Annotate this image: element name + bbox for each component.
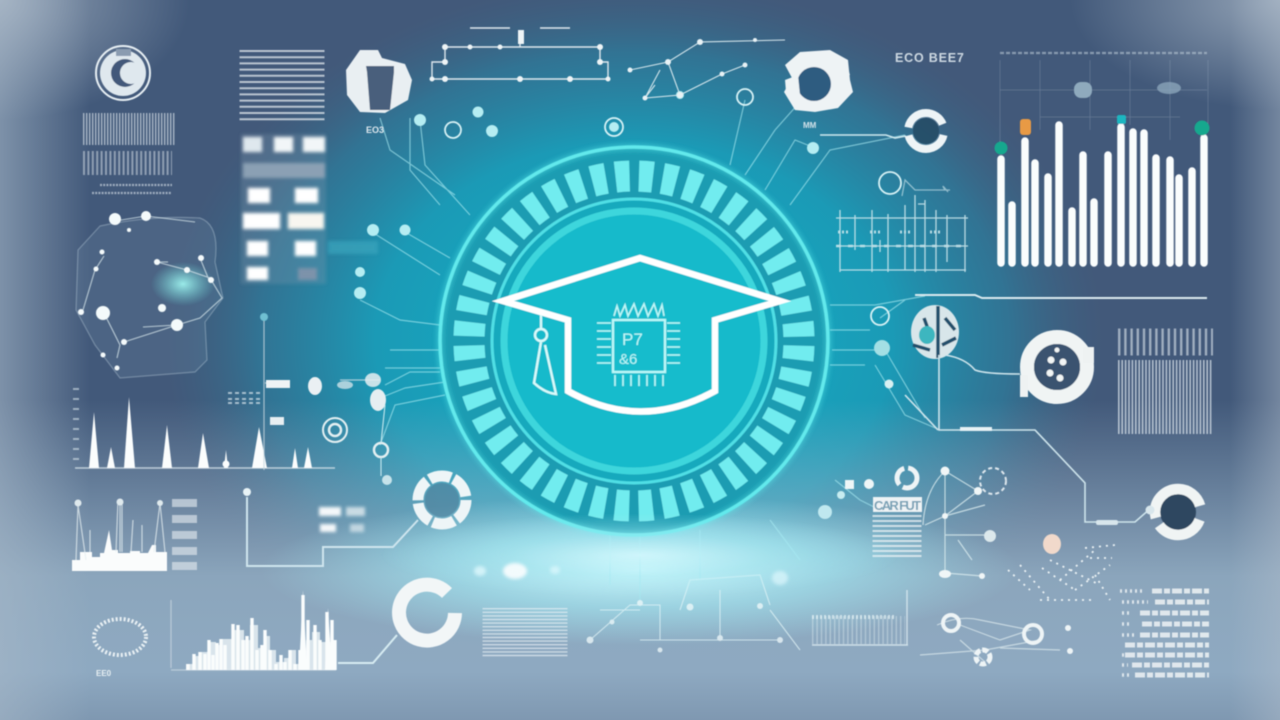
ring: dark band (440, 147, 828, 535)
circle icons upper center (445, 89, 901, 325)
icon: brain blob (911, 305, 959, 359)
icon: gear in ring (1020, 337, 1094, 397)
top right heading: ECO BEE7 (895, 51, 965, 65)
connector to gear and lower donut (905, 355, 1151, 525)
skyline chart bottom (171, 590, 336, 670)
donut lower right (1146, 489, 1201, 535)
ring: outer glow outline (440, 147, 828, 535)
icon cluster center left (265, 373, 392, 485)
node graph lower right (897, 466, 1006, 579)
icon: cap tassel (534, 315, 556, 394)
chip label: P7 (622, 330, 643, 349)
stripes panel (482, 608, 568, 658)
chart ornaments (1074, 82, 1092, 98)
bar chart top right (994, 53, 1210, 263)
scatter data points (1008, 545, 1115, 600)
data table lower right (1120, 591, 1209, 675)
ring labels: EE0 (96, 669, 112, 678)
table of blurred blocks (241, 134, 326, 284)
constellation network top center (628, 38, 785, 100)
icon: gauge circle top left (96, 46, 150, 100)
central ring badge (440, 147, 828, 535)
bar lines bottom center right (812, 590, 908, 645)
machinery cluster bottom right (920, 615, 1073, 664)
area chart left (72, 498, 197, 571)
icon: badge top center-left (346, 50, 412, 135)
open donut bottom (338, 585, 455, 663)
barcode block (83, 129, 176, 193)
cloud icon label: MM (803, 121, 817, 130)
ring: inner disc (504, 211, 764, 471)
small teal legend bar (328, 241, 378, 254)
ring: radial tick segments (469, 176, 799, 506)
circuit bottom center (586, 575, 800, 652)
orange blob marker (1043, 534, 1061, 554)
ring: inner band (492, 199, 776, 483)
badge label: EO3 (366, 125, 384, 135)
bars (1001, 125, 1204, 263)
legend chips (172, 499, 197, 570)
donut top right (820, 113, 944, 149)
blurred value blocks (319, 507, 365, 532)
small donut ring (897, 468, 917, 488)
long horizontal line (915, 295, 1207, 298)
text panel lower center right (873, 497, 922, 560)
axis ticks (73, 388, 79, 460)
connector and blocks center bottom left (243, 488, 418, 566)
icon: graduation cap (503, 258, 780, 412)
text lines block (240, 50, 324, 122)
circuit grid right of hub (836, 180, 968, 272)
barcode right (1118, 342, 1213, 397)
network nodes (78, 211, 214, 370)
bottom center light flare (380, 513, 900, 597)
node squares right of ring (818, 479, 874, 519)
bar caps (994, 142, 1008, 154)
dotted ring icon bottom left (94, 619, 146, 678)
small gauge ring (980, 468, 1006, 494)
ring: outer outline (440, 147, 828, 535)
circuit lines connecting to the hub (360, 85, 940, 600)
peak chart left (75, 313, 335, 470)
icon: microchip (597, 304, 680, 386)
icon: node pin dots right (874, 340, 894, 388)
donut center bottom left (418, 476, 466, 524)
peaks (89, 397, 312, 468)
data table stub (228, 393, 262, 403)
chip glyphs: &6 (619, 351, 637, 368)
icon: cloud flower top (784, 50, 853, 130)
chart grid (1000, 53, 1208, 150)
node dots upper left (354, 91, 819, 299)
text panel lower center right: CAR FUT (874, 498, 921, 513)
circuit diagram top center (430, 28, 610, 82)
network map (76, 211, 223, 378)
